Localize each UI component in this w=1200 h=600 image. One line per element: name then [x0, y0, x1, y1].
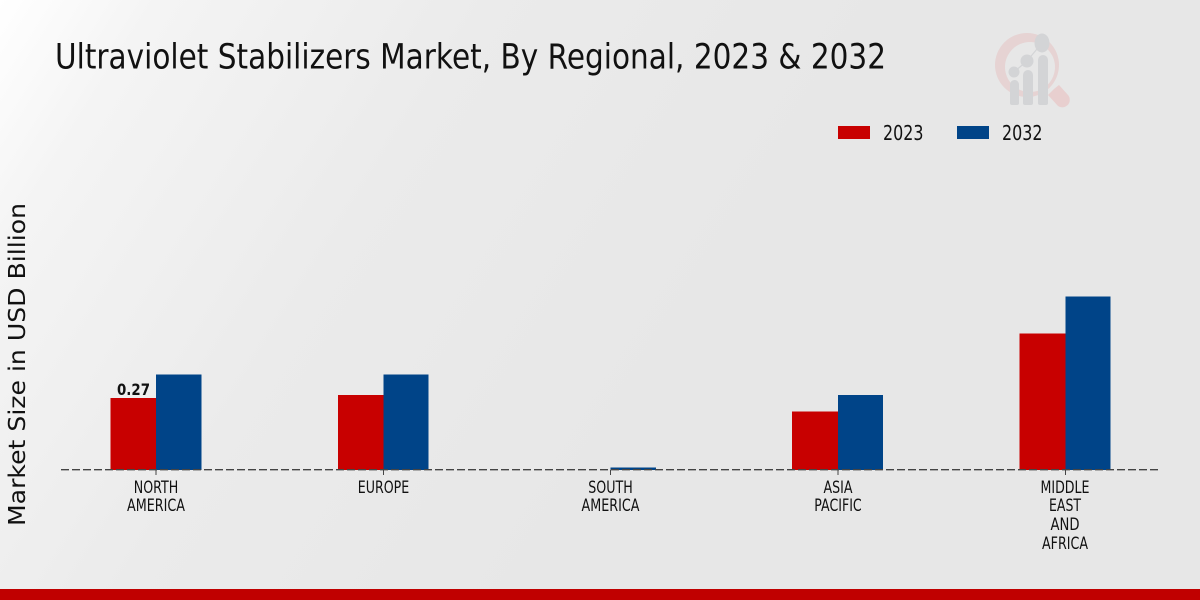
legend swatch: 2032: [957, 126, 989, 139]
x label: South America: AMERICA: [582, 496, 640, 515]
y-axis title: Market Size in USD Billion: [5, 203, 31, 526]
x label: Europe: EUROPE: [358, 478, 409, 497]
bars: North America: [110, 374, 202, 470]
legend: [838, 121, 1042, 145]
x label: Middle East and Africa: AFRICA: [1042, 534, 1089, 553]
x label: Middle East and Africa: MIDDLE: [1040, 478, 1090, 497]
bars: Asia Pacific: [792, 395, 883, 470]
x label: Asia Pacific: PACIFIC: [814, 496, 862, 515]
x label: Asia Pacific: [814, 478, 862, 515]
bars: Middle East and Africa: [1020, 296, 1110, 470]
value label: 0.27: 0.27: [117, 380, 150, 399]
legend label: 2023: 2023: [883, 121, 924, 145]
legend swatch: 2023: [838, 126, 870, 139]
footer bar: [0, 589, 1200, 600]
bars: Europe: [338, 374, 428, 470]
x label: Middle East and Africa: AND: [1050, 515, 1080, 534]
legend label: 2032: 2032: [1002, 121, 1042, 145]
x label: South America: SOUTH: [588, 478, 633, 497]
icon: watermark logo: [995, 33, 1070, 107]
x label: Middle East and Africa: [1040, 478, 1090, 553]
x label: South America: [582, 478, 640, 515]
bar chart: [61, 296, 1159, 553]
x label: North America: AMERICA: [127, 496, 186, 515]
x label: North America: [127, 478, 186, 515]
x-axis baseline: [61, 469, 1159, 471]
x label: Asia Pacific: ASIA: [824, 478, 853, 497]
title: Ultraviolet Stabilizers Market, By Regional, 2023 & 2032: [55, 38, 886, 78]
x label: North America: NORTH: [134, 478, 178, 497]
x label: Middle East and Africa: EAST: [1049, 496, 1082, 515]
bars: South America: [610, 468, 656, 470]
